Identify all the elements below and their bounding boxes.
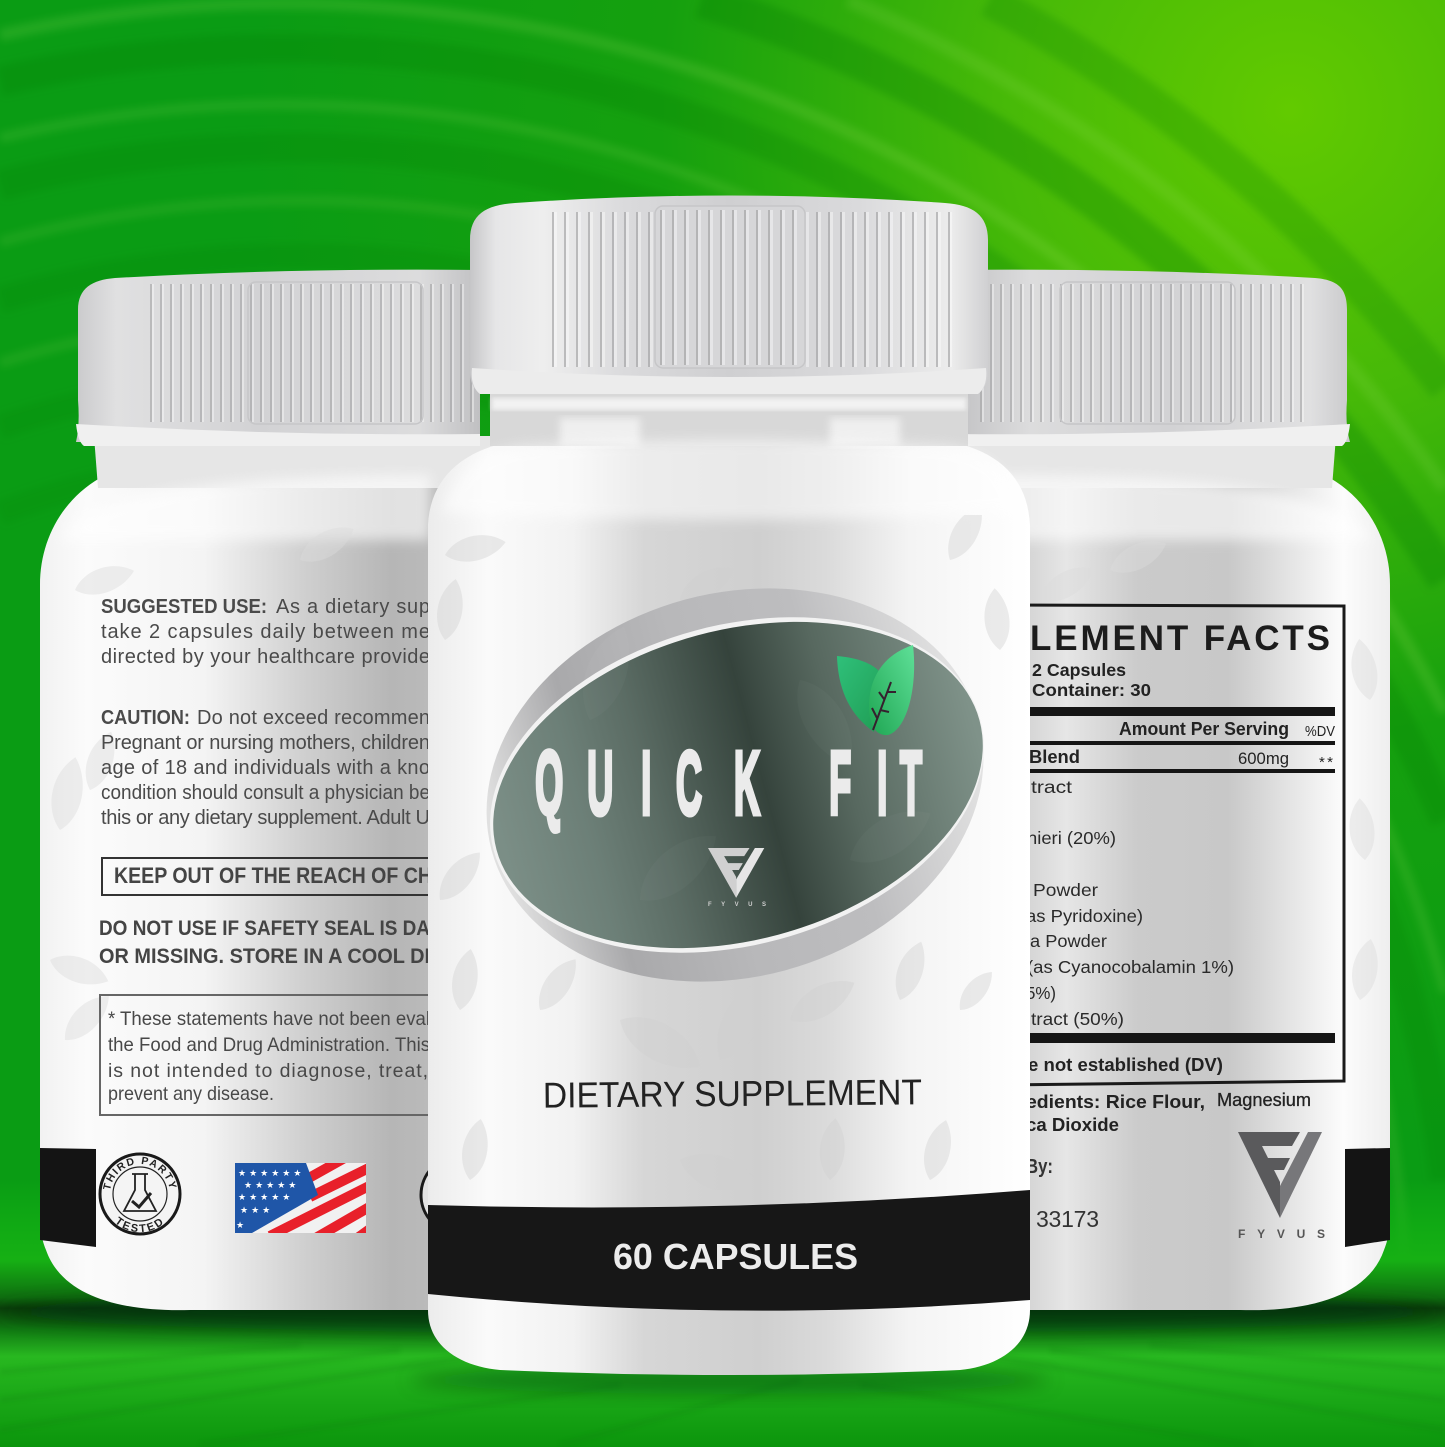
fyvus logo, badge bbox=[708, 848, 766, 908]
usa flag bbox=[235, 1163, 366, 1233]
disclaimer box: the Food and Drug Administration. This bbox=[108, 1034, 430, 1056]
safety seal warning: DO NOT USE IF SAFETY SEAL IS DA bbox=[99, 917, 430, 940]
disclaimer box: is not intended to diagnose, treat, bbox=[108, 1060, 428, 1082]
right bottle body bbox=[960, 436, 1390, 1310]
center cap bbox=[470, 196, 988, 394]
green leaves icon bbox=[837, 645, 914, 735]
blend row: 600mg bbox=[1238, 749, 1289, 768]
left neck bbox=[94, 436, 500, 488]
leaf pattern in oval bbox=[571, 620, 940, 915]
third party tested seal: THIRD PARTY bbox=[102, 1156, 177, 1189]
right cap bbox=[950, 270, 1350, 446]
black band, right bbox=[1345, 1148, 1390, 1247]
distributed by bbox=[1026, 1156, 1099, 1232]
serving info: Container: 30 bbox=[1032, 680, 1151, 700]
keep out of reach box: KEEP OUT OF THE REACH OF CH bbox=[114, 863, 432, 888]
disclaimer box: prevent any disease. bbox=[108, 1083, 274, 1105]
usa flag: ★ bbox=[236, 1220, 244, 1230]
safety seal warning bbox=[99, 917, 430, 968]
left shoulder highlight bbox=[60, 475, 430, 540]
60 capsules text: 60 CAPSULES bbox=[613, 1236, 858, 1277]
caution text: this or any dietary supplement. Adult U bbox=[101, 807, 430, 829]
blend row: Blend bbox=[1029, 747, 1080, 767]
other ingredients: edients: Rice Flour, bbox=[1026, 1092, 1205, 1112]
black band, center bbox=[428, 1190, 1030, 1311]
right label leaf pattern bbox=[1034, 532, 1383, 1002]
ingredient rows: tract bbox=[1031, 777, 1072, 797]
daily value footnote: e not established (DV) bbox=[1028, 1055, 1223, 1075]
ingredient rows bbox=[1026, 777, 1234, 1029]
blend row: ** bbox=[1319, 754, 1333, 771]
amount header: Amount Per Serving bbox=[1119, 719, 1289, 739]
ingredient rows: as Pyridoxine) bbox=[1026, 906, 1143, 926]
right shoulder highlight bbox=[1000, 475, 1372, 540]
dietary supplement text: DIETARY SUPPLEMENT bbox=[543, 1071, 922, 1116]
safety seal warning: OR MISSING. STORE IN A COOL DI bbox=[99, 945, 430, 968]
ingredient rows: Powder bbox=[1033, 880, 1098, 900]
black band, left bbox=[40, 1148, 96, 1247]
serving info: 2 Capsules bbox=[1032, 660, 1126, 680]
center neck bbox=[490, 388, 968, 446]
suggested use text: directed by your healthcare provide bbox=[101, 646, 430, 668]
quick fit title: QUICK FIT bbox=[535, 733, 922, 834]
usa flag: ★★★★★★ bbox=[238, 1168, 304, 1178]
ingredient rows: tract (50%) bbox=[1031, 1009, 1124, 1029]
left bottle: back label bbox=[40, 270, 494, 1310]
center bottle: front bbox=[428, 196, 1030, 1375]
other ingredients bbox=[1026, 1090, 1311, 1135]
distributed by: 33173 bbox=[1036, 1206, 1099, 1232]
ingredient rows: (as Cyanocobalamin 1%) bbox=[1027, 957, 1234, 977]
serving info bbox=[1032, 660, 1151, 700]
usa flag: ★★★★★ bbox=[238, 1192, 293, 1202]
ingredient rows: nieri (20%) bbox=[1027, 828, 1116, 848]
fyvus logo, label bbox=[1238, 1132, 1325, 1241]
supplement facts panel bbox=[1000, 605, 1344, 1085]
right bottle: supplement facts bbox=[950, 270, 1390, 1310]
other ingredients: Magnesium bbox=[1217, 1090, 1311, 1110]
partial seal bbox=[421, 1156, 499, 1234]
third party tested seal: TESTED bbox=[116, 1216, 162, 1232]
white inner line bbox=[452, 565, 1022, 1005]
silver ring bbox=[442, 534, 1028, 1036]
caution text: age of 18 and individuals with a kno bbox=[101, 757, 430, 779]
center body bbox=[428, 395, 1030, 1375]
fyvus logo, label: FYVUS bbox=[1238, 1227, 1325, 1241]
caution text: Do not exceed recommen bbox=[197, 707, 430, 729]
usa flag: ★★★ bbox=[240, 1205, 273, 1215]
dark oval bbox=[456, 571, 1020, 999]
distributed by: By: bbox=[1026, 1156, 1053, 1178]
left cap bbox=[76, 270, 480, 446]
disclaimer box: * These statements have not been eval bbox=[108, 1008, 430, 1030]
left label leaf pattern bbox=[45, 518, 360, 1048]
caution text: Pregnant or nursing mothers, children bbox=[101, 732, 430, 754]
fyvus logo, badge: FYVUS bbox=[708, 902, 766, 908]
caution text: CAUTION: bbox=[101, 707, 190, 729]
disclaimer box bbox=[100, 995, 445, 1115]
blend row bbox=[1029, 747, 1333, 771]
suggested use text: SUGGESTED USE: bbox=[101, 596, 267, 618]
suggested use text bbox=[101, 596, 430, 668]
suggested use text: take 2 capsules daily between me bbox=[101, 621, 430, 643]
ground shadow bbox=[0, 1290, 1444, 1334]
center shoulder highlight bbox=[442, 440, 1018, 520]
suggested use text: As a dietary sup bbox=[276, 596, 430, 618]
ingredient rows: 5%) bbox=[1026, 983, 1056, 1003]
right neck bbox=[960, 436, 1336, 488]
center label leaf pattern bbox=[430, 500, 1012, 1205]
usa flag: ★★★★★ bbox=[244, 1180, 299, 1190]
caution text: condition should consult a physician be bbox=[101, 782, 430, 804]
other ingredients: ca Dioxide bbox=[1026, 1115, 1119, 1135]
caution text bbox=[101, 707, 430, 829]
left bottle body bbox=[40, 436, 500, 1310]
third party tested seal bbox=[98, 1152, 182, 1236]
panel title: LEMENT FACTS bbox=[1030, 619, 1330, 658]
amount header: %DV bbox=[1305, 723, 1335, 740]
keep out of reach box bbox=[102, 858, 442, 895]
oval badge bbox=[442, 534, 1028, 1036]
ingredient rows: a Powder bbox=[1030, 931, 1107, 951]
center bottle shadow bbox=[410, 1366, 1050, 1394]
